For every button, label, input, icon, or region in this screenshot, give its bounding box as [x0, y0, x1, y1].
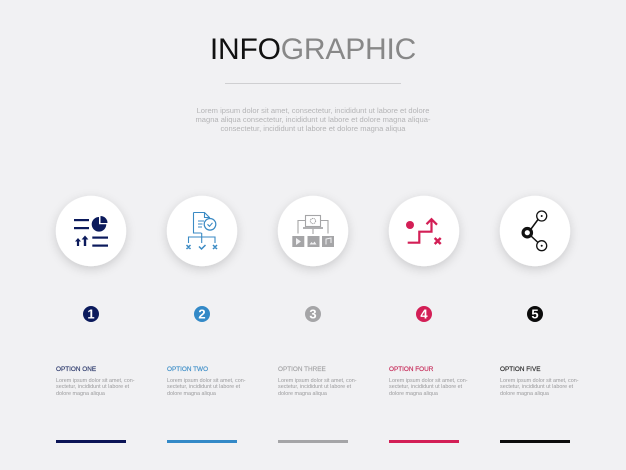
title divider [225, 83, 401, 84]
number badge 3: 3 [309, 307, 317, 322]
number badge 3 [305, 306, 321, 322]
icon circle 1: charts and arrows [56, 196, 126, 266]
option three block: OPTION THREE [278, 366, 326, 372]
option three block: sectetur, incididunt ut labore et [278, 384, 351, 390]
option five block: sectetur, incididunt ut labore et [500, 384, 573, 390]
title: INFOGRAPHIC [210, 33, 416, 66]
option four block: OPTION FOUR [389, 366, 433, 372]
option two block: OPTION TWO [167, 366, 208, 372]
option two block [167, 366, 246, 443]
option two block: Lorem ipsum dolor sit amet, con- [167, 378, 246, 384]
intro text [196, 106, 430, 133]
option two block: dolore magna aliqua [167, 391, 216, 397]
option five block: dolore magna aliqua [500, 391, 549, 397]
option two block: sectetur, incididunt ut labore et [167, 384, 240, 390]
number badge 2 [194, 306, 210, 322]
option one block [56, 366, 134, 443]
option five block: OPTION FIVE [500, 366, 540, 372]
icon circle 2: document review flow [167, 196, 237, 266]
option three block [278, 366, 356, 443]
number badge 2: 2 [198, 307, 206, 322]
option one block: dolore magna aliqua [56, 391, 105, 397]
option one block: sectetur, incididunt ut labore et [56, 384, 129, 390]
intro text: consectetur, incididunt ut labore et dolore magna aliqua [220, 124, 406, 133]
number badge 4 [416, 306, 432, 322]
number badge 5 [527, 306, 543, 322]
option four block: dolore magna aliqua [389, 391, 438, 397]
icons and numbered badges [52, 195, 574, 322]
option one block: Lorem ipsum dolor sit amet, con- [56, 378, 134, 384]
option five block [500, 366, 578, 443]
number badge 1: 1 [87, 307, 95, 322]
option four block: Lorem ipsum dolor sit amet, con- [389, 378, 468, 384]
option three block: Lorem ipsum dolor sit amet, con- [278, 378, 356, 384]
number badge 4: 4 [420, 307, 428, 322]
option one block: OPTION ONE [56, 366, 96, 372]
option four block: sectetur, incididunt ut labore et [389, 384, 462, 390]
number badge 5: 5 [531, 307, 539, 322]
intro text: Lorem ipsum dolor sit amet, consectetur, incididunt ut labore et dolore [197, 106, 429, 115]
icon circle 4: stairs with arrow [389, 196, 459, 266]
option five block: Lorem ipsum dolor sit amet, con- [500, 378, 578, 384]
number badge 1 [83, 306, 99, 322]
intro text: magna aliqua consectetur, incididunt ut labore et dolore magna aliqua- [196, 115, 430, 124]
icon circle 3: laptop and media flow [278, 196, 348, 266]
icon circle 5: share nodes [500, 196, 570, 266]
option three block: dolore magna aliqua [278, 391, 327, 397]
option four block [389, 366, 468, 443]
